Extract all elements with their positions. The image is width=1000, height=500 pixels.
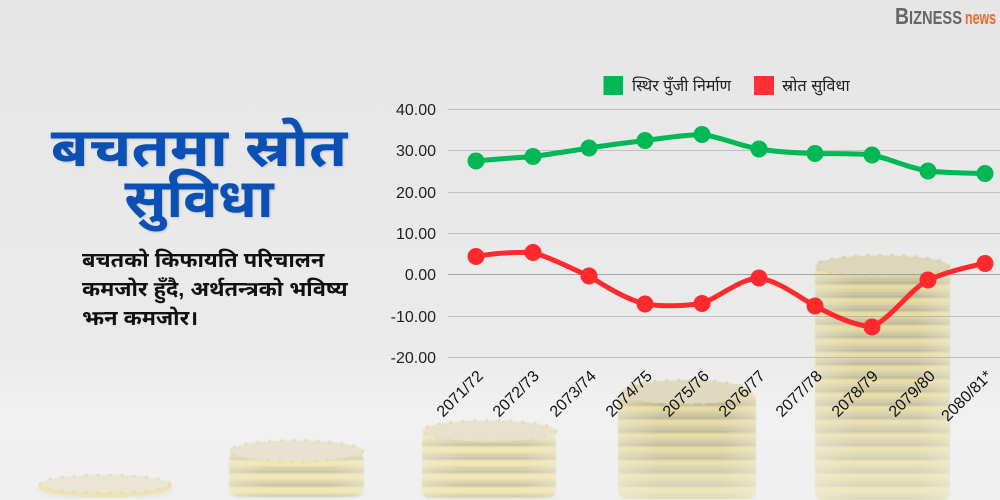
x axis labels: 2077/78 (773, 368, 826, 421)
subtitle text (82, 248, 348, 330)
x axis labels: 2075/76 (660, 368, 713, 421)
legend item: green (604, 76, 732, 96)
x axis labels: 2074/75 (603, 368, 656, 421)
x axis labels: 2073/74 (547, 368, 600, 421)
y axis labels (391, 102, 436, 367)
x axis labels: 2078/79 (829, 368, 882, 421)
x axis labels: 2071/72 (434, 368, 487, 421)
title: सुविधा (124, 169, 274, 229)
subtitle text: झन कमजोर। (82, 307, 198, 330)
x axis labels: 2072/73 (490, 368, 543, 421)
logo (895, 3, 996, 29)
legend item: green: स्थिर पुँजी निर्माण (632, 76, 732, 96)
grid lines (448, 110, 1000, 358)
coin stack 4 (618, 380, 756, 499)
chart (391, 76, 1000, 425)
subtitle text: कमजोर हुँदै, अर्थतन्त्रको भविष्य (82, 278, 348, 301)
x axis labels: 2076/77 (716, 368, 769, 421)
y axis labels: 30.00 (396, 143, 436, 160)
y axis labels: 10.00 (396, 226, 436, 243)
title: बचतमा स्रोत (51, 118, 347, 178)
subtitle text: बचतको किफायति परिचालन (82, 249, 324, 272)
green line series (468, 126, 994, 182)
y axis labels: -10.00 (391, 309, 436, 326)
x axis labels: 2080/81* (939, 368, 996, 425)
red line series (468, 244, 994, 336)
y axis labels: 20.00 (396, 185, 436, 202)
coin stack 5 (815, 256, 950, 500)
coin stack 1 (37, 475, 173, 498)
legend (604, 76, 850, 96)
title (50, 118, 350, 234)
y axis labels: -20.00 (391, 350, 436, 367)
coin stack 3 (419, 420, 559, 498)
x axis labels (434, 368, 996, 425)
logo: IZNESS (909, 8, 962, 28)
legend item: red (754, 76, 850, 96)
y axis labels: 40.00 (396, 102, 436, 119)
x axis labels: 2079/80 (886, 368, 939, 421)
y axis labels: 0.00 (405, 267, 436, 284)
coin stack 2 (226, 440, 366, 497)
logo: B (895, 3, 909, 29)
legend item: red: स्रोत सुविधा (782, 77, 850, 96)
